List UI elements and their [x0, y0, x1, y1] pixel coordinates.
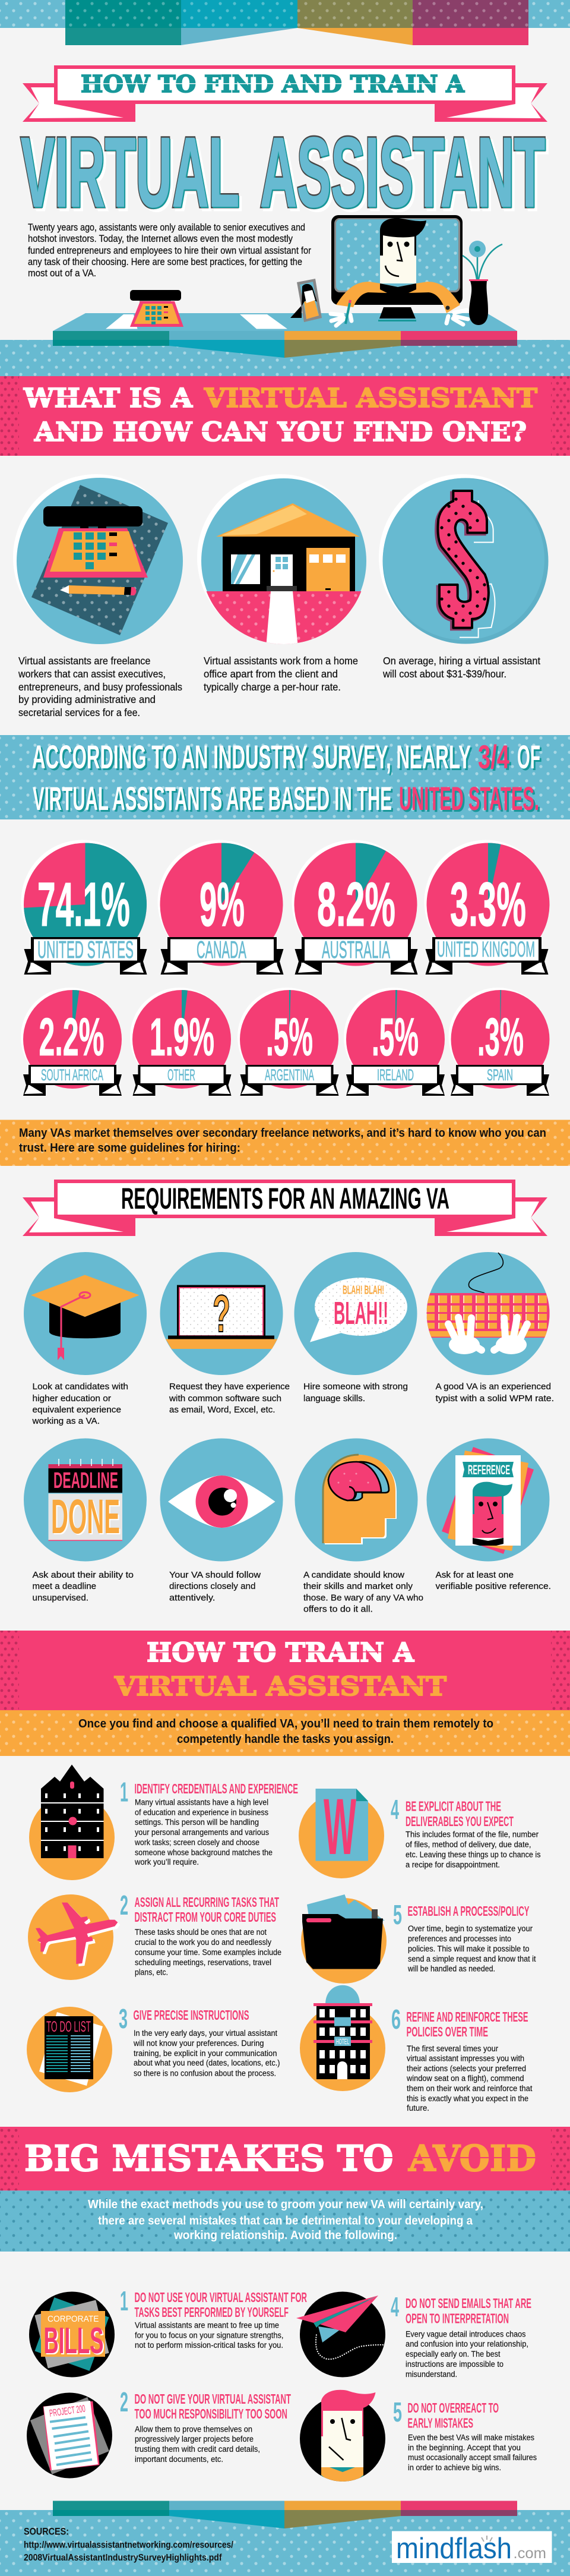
icon: speech bubble: BLAH!! [334, 1295, 388, 1331]
pie chart: Argentina .5% [238, 988, 338, 1096]
text: Many virtual assistants have a high level [135, 1798, 268, 1806]
text: Ask about their ability to [32, 1570, 134, 1580]
text: directions closely and [169, 1581, 255, 1591]
number 4: 4 [391, 1794, 399, 1825]
text: typist with a solid WPM rate. [436, 1393, 554, 1404]
icon: corporate bills: CORPORATE [48, 2314, 99, 2324]
text: etc. Leaving these things up to chance is [406, 1850, 541, 1859]
pie chart: South Africa 2.2%: 2.2% [39, 1008, 104, 1067]
text: this is exactly what you expect in the [407, 2094, 528, 2103]
desk illustration [53, 215, 517, 358]
panel: deadline requirement: DONE [52, 1491, 121, 1545]
step 2: recurring tasks [28, 1890, 281, 1980]
heading: DO NOT USE YOUR VIRTUAL ASSISTANT FOR [134, 2290, 307, 2305]
text: home office: Virtual assistants work from a home [204, 655, 358, 667]
text: of education and experience in business [135, 1808, 268, 1817]
text: offers to do it all. [303, 1604, 373, 1614]
number 1: 1 [120, 1777, 128, 1808]
pie chart: Ireland .5%: .5% [372, 1008, 419, 1067]
train intro band: Once you find and choose a qualified VA, you’ll need to train them remotely to [78, 1717, 493, 1730]
text: will not know your preferences. During [133, 2039, 264, 2048]
hiring guidelines band: trust. Here are some guidelines for hiring: [19, 1142, 240, 1155]
text: home office [204, 655, 358, 693]
text: those. Be wary of any VA who [303, 1593, 423, 1603]
footer band with ribbon [0, 2501, 570, 2576]
mistakes intro band: While the exact methods you use to groom your new VA will certainly vary, [88, 2198, 483, 2211]
text [31, 1382, 128, 1426]
panel: deadline requirement [24, 1438, 147, 1603]
mistake 2 [27, 2386, 291, 2478]
heading: DO NOT GIVE YOUR VIRTUAL ASSISTANT [134, 2391, 291, 2407]
pie chart: South Africa 2.2%: SOUTH AFRICA [41, 1066, 103, 1084]
icon: dollar sign [436, 491, 495, 638]
text: freelance workers: secretarial services for a fee. [18, 707, 140, 718]
text: progressively larger projects before [135, 2435, 254, 2443]
heading: EARLY MISTAKES [407, 2415, 473, 2430]
text: them on their work and reinforce that [407, 2084, 533, 2093]
text: work tasks; screen closely and choose [134, 1838, 259, 1847]
section header: what is a virtual assistant: WHAT IS A [23, 383, 193, 414]
text: with common software such [169, 1393, 281, 1404]
icon: assistant character [331, 218, 468, 326]
text: hourly cost: will cost about $31-$39/hour. [382, 668, 506, 680]
heading [134, 1894, 279, 1925]
panel: software requirement [160, 1252, 290, 1415]
icon: airplane [36, 1903, 120, 1966]
text: for you to focus on your signature strengths, [135, 2331, 284, 2340]
step 4: deliverables [299, 1783, 541, 1878]
section header: what is a virtual assistant: VIRTUAL ASSISTANT [204, 383, 537, 414]
panel: hourly cost circle [379, 474, 549, 644]
icon: laptop with question mark [166, 1284, 277, 1349]
text [32, 1570, 134, 1603]
pie chart: Spain .3% [449, 988, 550, 1096]
text: virtual assistant impresses you with [407, 2054, 524, 2063]
survey statement band [0, 735, 570, 819]
train intro band [0, 1710, 570, 1756]
panel: home office circle [196, 474, 374, 648]
main title: VIRTUAL [22, 119, 240, 229]
number 6: 6 [391, 2004, 401, 2035]
pie chart: Argentina .5%: .5% [266, 1008, 313, 1067]
icon: folder [302, 1894, 385, 1969]
heading: POLICIES OVER TIME [406, 2024, 488, 2039]
text: policies. This will make it possible to [408, 1944, 530, 1953]
icon: hotel [314, 1985, 372, 2079]
text: must occasionally accept small failures [408, 2453, 537, 2462]
text: misunderstand. [406, 2370, 457, 2379]
pie chart: Australia 8.2%: 8.2% [317, 870, 395, 939]
text: instructions are impossible to [406, 2360, 504, 2369]
mistakes intro band: there are several mistakes that can be detrimental to your developing a [98, 2214, 473, 2227]
text: scheduling meetings, reservations, travel [135, 1958, 271, 1967]
text: A candidate should know [303, 1570, 404, 1580]
panel: freelance workers circle [13, 474, 183, 644]
heading [407, 2400, 499, 2430]
icon: paper plane [296, 2296, 384, 2359]
text: preferences and processes into [408, 1934, 511, 1943]
number 2: 2 [120, 2386, 128, 2417]
text: your personal arrangements and various [135, 1828, 269, 1837]
text: and confusion into your relationship, [406, 2339, 528, 2348]
heading [134, 2290, 307, 2320]
text: equivalent experience [32, 1405, 121, 1415]
text: window seat on a flight), commend [406, 2074, 524, 2083]
pie chart: Canada 9%: 9% [200, 870, 245, 939]
text: send a simple request and know that it [408, 1954, 536, 1963]
number 3: 3 [119, 2003, 128, 2034]
icon: W document: W [324, 1783, 356, 1871]
survey statement band: OF [517, 738, 540, 775]
text: freelance workers: workers that can assist executives, [18, 668, 166, 680]
text: of files, method of delivery, due date, [406, 1840, 531, 1849]
pie chart: Argentina .5%: ARGENTINA [265, 1066, 314, 1084]
heading [406, 2296, 531, 2326]
text: meet a deadline [32, 1581, 96, 1591]
logo: mindflash.com: mindflash [396, 2533, 512, 2565]
pie chart: Australia 8.2% [292, 840, 418, 975]
heading: GIVE PRECISE INSTRUCTIONS [133, 2007, 249, 2023]
text: someone whose background matches the [135, 1848, 273, 1857]
icon: eye [168, 1475, 276, 1528]
text: settings. This person will be handling [135, 1818, 259, 1827]
text: verifiable positive reference. [436, 1581, 551, 1591]
pie chart: Other 1.9%: 1.9% [150, 1008, 214, 1067]
intro text: funded entrepreneurs and employees to hire their own virtual assistant for [28, 245, 311, 256]
icon: reference sheet [442, 1447, 534, 1554]
panel: education requirement [24, 1252, 147, 1426]
icon: frowning man [321, 2390, 375, 2485]
icon: graduation cap [31, 1275, 139, 1360]
number 5: 5 [393, 2397, 402, 2427]
text: trusting them with credit card details, [135, 2445, 260, 2454]
section header: big mistakes: AVOID [408, 2138, 536, 2180]
pie chart: Spain .3%: SPAIN [487, 1066, 513, 1084]
section header: how to train: VIRTUAL ASSISTANT [114, 1672, 446, 1702]
text: will be handled as needed. [407, 1965, 495, 1973]
lower dotted band [0, 340, 570, 376]
mistake 1 [29, 2285, 307, 2377]
text: Hire someone with strong [303, 1382, 408, 1392]
text [135, 1928, 281, 1976]
text: freelance workers: by providing administrative and [18, 693, 156, 705]
icon: project document [30, 2397, 109, 2474]
text: a recipe for disappointment. [406, 1860, 500, 1869]
panel: language requirement [294, 1252, 417, 1404]
pie chart: Canada 9%: CANADA [197, 936, 246, 963]
pie chart: Canada 9% [158, 840, 284, 975]
text: Every vague detail introduces chaos [406, 2329, 526, 2339]
text: These tasks should be ones that are not [135, 1928, 267, 1937]
icon: house [216, 503, 360, 591]
icon: flower vase [463, 241, 502, 325]
text [408, 2433, 537, 2472]
icon: corporate bills: BILLS [44, 2320, 103, 2361]
icon: head with brain [323, 1455, 397, 1544]
intro text: Twenty years ago, assistants were only available to senior executives and [28, 222, 305, 233]
main title: VIRTUAL [21, 118, 239, 228]
text: their skills and market only [303, 1581, 413, 1591]
text [406, 1830, 541, 1869]
text [303, 1382, 408, 1404]
mistake 5 [300, 2390, 537, 2485]
icon: hotel: HOTEL [336, 2037, 349, 2046]
number 4: 4 [391, 2291, 399, 2322]
icon: corporate bills [34, 2297, 109, 2371]
text: not to perform mission-critical tasks for you. [135, 2341, 283, 2350]
text: hourly cost [382, 655, 540, 680]
text: consume your time. Some examples include [135, 1948, 281, 1957]
text: language skills. [303, 1393, 365, 1404]
text: so there is no confusion about the process. [134, 2069, 276, 2077]
icon: school building [41, 1765, 103, 1858]
text [407, 1924, 536, 1973]
icon: project document: PROJECT 200 [49, 2403, 86, 2419]
step 6: refine policies [300, 1985, 533, 2112]
icon: deadline calendar: DEADLINE [53, 1468, 118, 1493]
text [133, 2029, 280, 2077]
icon: to do list [39, 2012, 103, 2086]
text: freelance workers [18, 655, 182, 718]
icon: keyboard and hands [425, 1253, 552, 1354]
text: about what you need (dates, locations, etc.) [134, 2058, 280, 2067]
icon: computer monitor [331, 215, 463, 321]
heading: ASSIGN ALL RECURRING TASKS THAT [134, 1894, 279, 1910]
survey statement band: 3/4 [480, 740, 511, 777]
text: Allow them to prove themselves on [135, 2425, 252, 2434]
text: home office: typically charge a per-hour rate. [204, 681, 341, 693]
text: freelance workers: Virtual assistants are freelance [18, 655, 151, 667]
logo: mindflash.com: .com [513, 2545, 546, 2562]
heading [406, 1798, 514, 1829]
heading [134, 2391, 291, 2421]
text: Virtual assistants are meant to free up time [135, 2321, 279, 2329]
intro text: hotshot investors. Today, the Internet allows even the most modestly [28, 233, 293, 244]
section header: what is a virtual assistant: AND HOW CAN YOU FIND ONE? [34, 417, 527, 447]
heading: BE EXPLICIT ABOUT THE [406, 1798, 501, 1814]
number 5: 5 [393, 1899, 402, 1930]
icon: deadline calendar: DONE [51, 1490, 120, 1544]
panel: skills requirement [294, 1438, 423, 1614]
mistakes intro band: working relationship. Avoid the following. [173, 2229, 397, 2242]
pie chart: United States 74.1% [21, 840, 147, 975]
top dotted band with ribbon [0, 0, 570, 45]
text: training, be explicit in your communication [134, 2049, 277, 2058]
pie chart: South Africa 2.2% [21, 988, 122, 1096]
title banner [23, 65, 547, 122]
text: their actions (selects your preferred [407, 2064, 526, 2073]
pie chart: Other 1.9%: OTHER [167, 1066, 195, 1084]
heading: TASKS BEST PERFORMED BY YOURSELF [134, 2304, 289, 2320]
text: Your VA should follow [169, 1570, 261, 1580]
icon: W document [316, 1783, 368, 1871]
text: hourly cost: On average, hiring a virtual assistant [383, 655, 540, 667]
intro text: most out of a VA. [28, 267, 96, 279]
number 2: 2 [120, 1890, 128, 1921]
requirements banner [23, 1180, 547, 1236]
pie chart: Australia 8.2%: AUSTRALIA [322, 936, 390, 963]
text [303, 1570, 423, 1614]
icon: deadline calendar [49, 1459, 122, 1545]
text [169, 1570, 261, 1603]
icon: pencil [60, 585, 137, 595]
text: freelance workers: entrepreneurs, and busy professionals [18, 681, 182, 693]
text [436, 1570, 551, 1591]
heading: DISTRACT FROM YOUR CORE DUTIES [134, 1909, 276, 1925]
mistakes intro band [0, 2190, 570, 2252]
text: A good VA is an experienced [436, 1382, 551, 1392]
intro text: any task of their choosing. Here are some best practices, for getting the [28, 256, 302, 267]
icon: desk phone [130, 290, 183, 327]
icon: reference sheet: REFERENCE [468, 1462, 510, 1477]
text: Even the best VAs will make mistakes [408, 2433, 534, 2442]
text: plans, etc. [135, 1968, 168, 1976]
sources: 2008VirtualAssistantIndustrySurveyHighlights.pdf [24, 2553, 222, 2563]
text: Ask for at least one [436, 1570, 514, 1580]
heading: IDENTIFY CREDENTIALS AND EXPERIENCE [134, 1781, 298, 1796]
text: in the beginning. Accept that you [408, 2443, 521, 2452]
pie chart: United Kingdom 3.3% [424, 840, 550, 975]
section header: how to train [0, 1631, 570, 1710]
text: Request they have experience [169, 1382, 290, 1392]
train intro band: competently handle the tasks you assign. [177, 1733, 394, 1746]
survey statement band: OF [519, 740, 542, 777]
pie chart: Ireland .5% [344, 988, 445, 1096]
text: crucial to the work you do and needlessly [135, 1938, 271, 1947]
text: future. [407, 2104, 429, 2112]
pie chart: Other 1.9% [130, 988, 232, 1096]
section header: big mistakes: BIG MISTAKES TO [24, 2138, 393, 2180]
icon: speech bubble [310, 1278, 407, 1342]
text: in order to achieve big wins. [408, 2463, 501, 2472]
text: The first several times your [407, 2044, 498, 2053]
mistake 4 [296, 2291, 531, 2379]
text [436, 1382, 554, 1404]
text: especially early on. The best [406, 2350, 501, 2359]
section header: how to train: HOW TO TRAIN A [147, 1638, 414, 1668]
pie chart: Ireland .5%: IRELAND [377, 1066, 414, 1084]
panel: directions requirement [160, 1438, 283, 1603]
text: unsupervised. [32, 1593, 88, 1603]
hiring guidelines band [0, 1120, 570, 1166]
text [169, 1382, 290, 1415]
banner heading: HOW TO FIND AND TRAIN A [81, 71, 465, 98]
icon: laptop with question mark: ? [213, 1284, 230, 1343]
main title: VIRTUAL [24, 121, 242, 231]
text [406, 2329, 528, 2379]
sources: http://www.virtualassistantnetworking.com/resources/ [24, 2540, 233, 2550]
number 1: 1 [120, 2285, 128, 2316]
intro text [28, 222, 311, 279]
sources [24, 2525, 233, 2563]
panel: typing requirement [425, 1252, 554, 1404]
text: home office: office apart from the client and [204, 668, 338, 680]
panel: reference requirement [426, 1438, 551, 1591]
icon: to do list: TO DO LIST [46, 2019, 91, 2035]
text: In the very early days, your virtual assistant [134, 2029, 277, 2038]
text: work you’ll require. [134, 1858, 199, 1866]
step 1: credentials [29, 1765, 298, 1880]
text: This includes format of the file, number [406, 1830, 539, 1839]
main title: VIRTUAL [21, 118, 239, 228]
text: higher education or [32, 1393, 111, 1404]
text: Look at candidates with [32, 1382, 128, 1392]
pie chart: United States 74.1%: 74.1% [37, 870, 130, 939]
text: working as a VA. [31, 1416, 100, 1426]
heading [406, 2009, 528, 2039]
heading: DO NOT OVERREACT TO [407, 2400, 499, 2416]
section header: what is a virtual assistant [0, 376, 570, 456]
pie chart: Spain .3%: .3% [477, 1008, 524, 1067]
text: important documents, etc. [135, 2455, 223, 2464]
text [135, 2321, 284, 2350]
icon: speech bubble: BLAH! BLAH! [343, 1284, 384, 1297]
text: Over time, begin to systematize your [408, 1924, 533, 1933]
step 5: process [301, 1894, 536, 1984]
pie chart: United States 74.1%: UNITED STATES [37, 936, 134, 963]
text [134, 1798, 273, 1866]
survey statement band: 3/4 [478, 738, 509, 775]
step 3: precise instructions [27, 2003, 280, 2092]
sources: SOURCES: [24, 2525, 69, 2537]
text: as email, Word, Excel, etc. [169, 1405, 276, 1415]
icon: corporate bills: BILLS [45, 2322, 104, 2363]
icon: photo frame [290, 279, 322, 322]
icon: telephone [43, 506, 148, 578]
text [406, 2044, 533, 2112]
text [135, 2425, 260, 2464]
text: attentively. [169, 1593, 215, 1603]
heading: TOO MUCH RESPONSIBILITY TOO SOON [134, 2406, 287, 2421]
section header: big mistakes [0, 2127, 570, 2190]
